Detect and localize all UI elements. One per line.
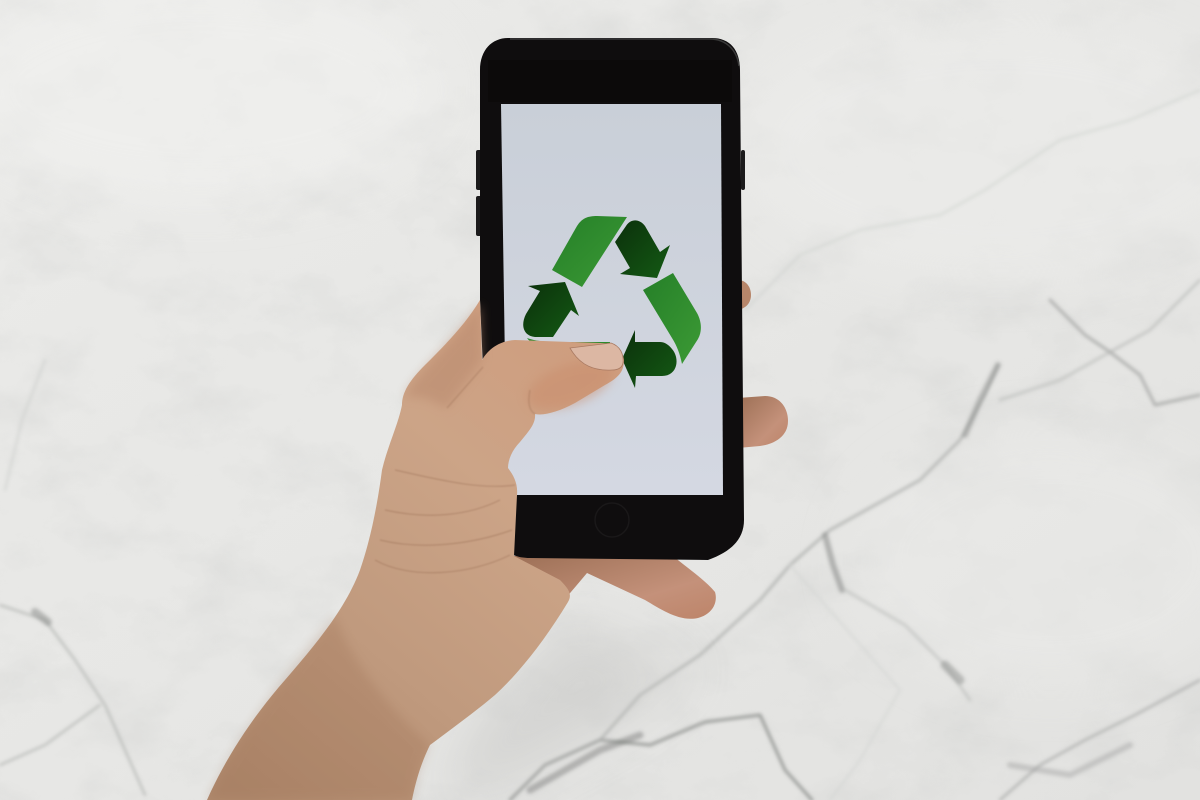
phone body <box>480 38 744 560</box>
palm and thumb <box>207 300 624 800</box>
knuckle creases <box>375 367 535 573</box>
phone <box>476 38 745 560</box>
phone screen <box>501 104 723 495</box>
rear fingers behind phone <box>505 280 788 620</box>
arrow band: top left <box>552 216 627 287</box>
arrow head: bottom <box>622 330 677 388</box>
hand shadow on marble <box>440 620 690 800</box>
hand with thumb <box>207 300 624 800</box>
arrow head: top <box>615 220 670 278</box>
thumb tip warmth <box>521 351 619 419</box>
arrow head: left <box>523 282 579 337</box>
wrist shading <box>207 615 430 800</box>
arrow band: right <box>643 273 701 364</box>
thumbnail <box>570 343 623 370</box>
arrow band: bottom left <box>527 338 610 350</box>
home button <box>595 503 629 537</box>
side buttons <box>476 150 745 236</box>
index finger web shading <box>405 304 482 408</box>
recycling symbol <box>523 216 701 388</box>
